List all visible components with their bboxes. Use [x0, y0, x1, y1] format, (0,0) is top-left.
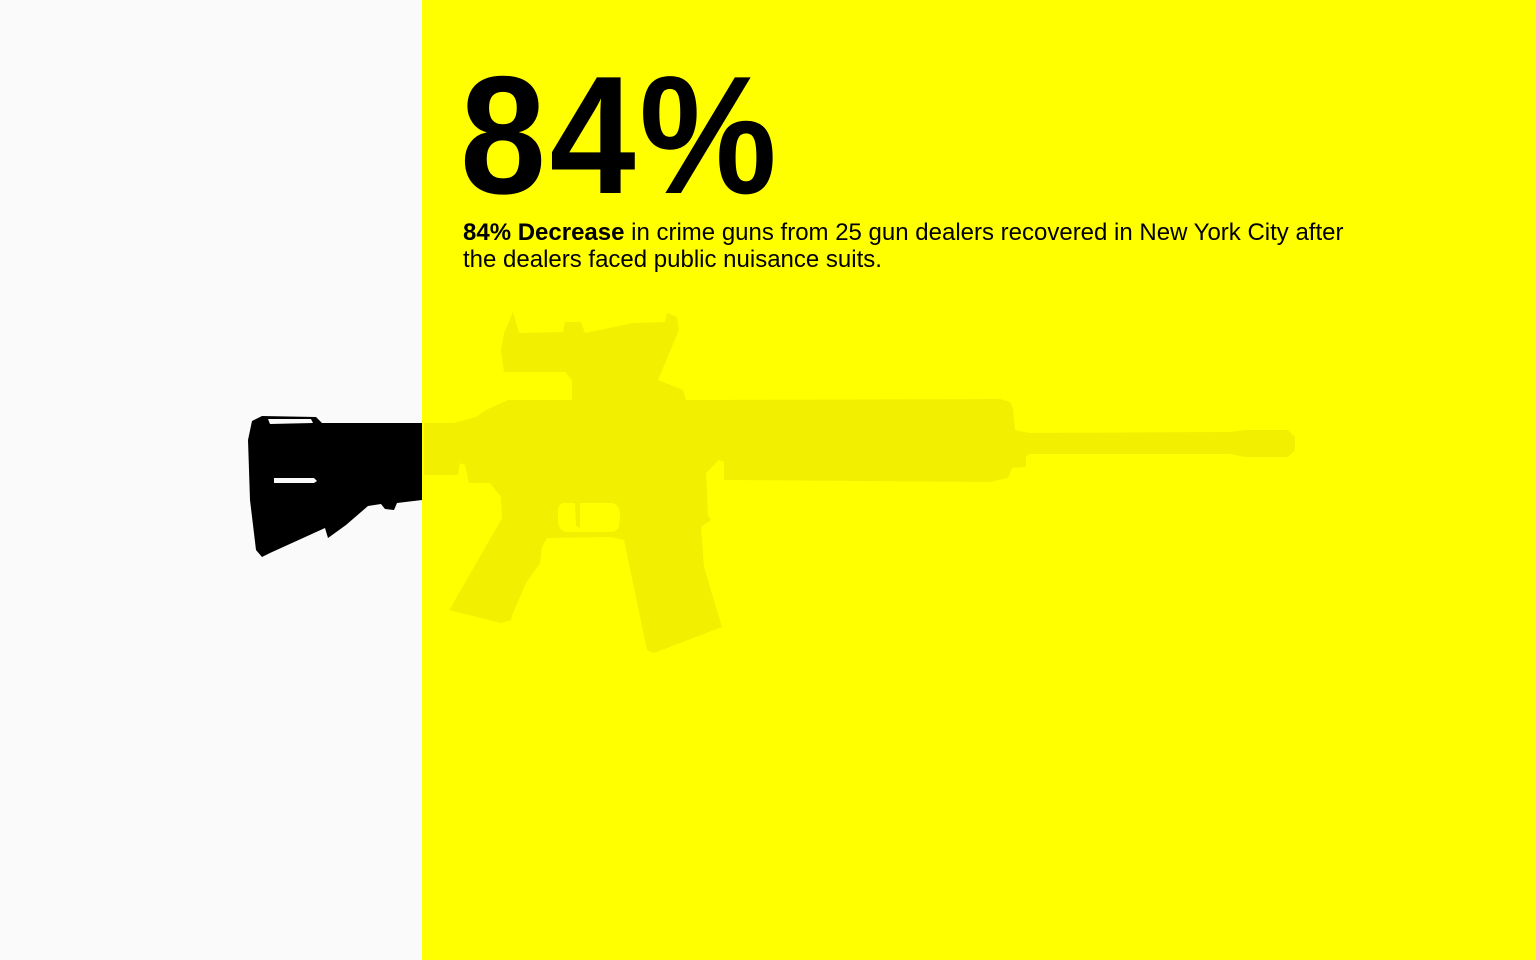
heading: 84%: 84% — [460, 41, 780, 229]
trigger guard opening — [558, 503, 620, 532]
panel: yellow background — [422, 0, 1536, 960]
black stock on grey side — [248, 416, 422, 557]
text block: description: 84% Decrease in crime guns from 25 gun dealers recovered in New York City after the dealers faced public nuisance suits. — [463, 219, 1343, 273]
faded rifle body on yellow — [424, 312, 1295, 653]
